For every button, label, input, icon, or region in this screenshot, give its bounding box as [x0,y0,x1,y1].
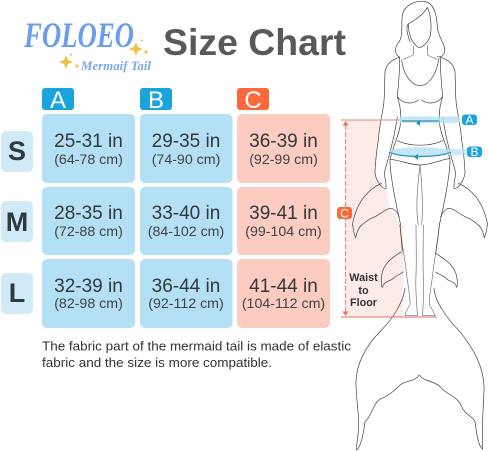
cell S B: 29-35 in [152,131,220,152]
logo [23,15,152,73]
measure B hip band [389,145,482,160]
waist to floor label [349,272,378,309]
waist to floor label: to [358,285,369,297]
cell M A: (72-88 cm) [54,224,123,240]
column header C [237,87,269,114]
cell M A: 28-35 in [54,203,123,224]
cell S A: (64-78 cm) [54,152,123,168]
cell L C: 41-44 in [249,276,318,297]
cell M C: 39-41 in [249,203,318,224]
footnote text: fabric and the size is more compatible. [42,356,272,370]
measure A waist band: A [465,113,474,127]
waist to floor label: Waist [349,272,378,284]
cell S C [237,114,330,183]
row label S [1,131,33,172]
waist to floor shaded area [345,120,403,317]
cell S A [42,114,135,183]
row label M [1,201,33,242]
figure upper body [352,1,488,227]
mermaid figure [352,1,488,450]
cell M A [42,187,135,255]
footnote text: The fabric part of the mermaid tail is made of elastic [42,340,351,354]
cell S C: (92-99 cm) [249,152,318,168]
cell M C [237,187,330,255]
cell L C [237,259,330,328]
column header B: B [148,87,164,114]
cell L A: (82-98 cm) [54,296,123,312]
waist to floor label: Floor [350,297,378,309]
logo: Mermaif Tail [80,59,152,73]
cell M B: 33-40 in [152,203,220,224]
cell L A: 32-39 in [54,276,123,297]
row label S: S [8,136,26,166]
cell L A [42,259,135,328]
column header A: A [50,87,66,114]
cell L B [140,259,232,328]
cell S B: (74-90 cm) [152,152,220,168]
cell M C: (99-104 cm) [245,224,322,240]
cell M B [140,187,232,255]
cell S C: 36-39 in [249,131,318,152]
badge C: C [340,206,349,220]
row label L [1,273,33,314]
waist to floor measurement line [341,120,437,317]
column header A [42,87,74,114]
footnote text [42,340,351,370]
column header B [140,87,172,114]
row label M: M [6,207,28,237]
title: Size Chart [163,21,347,63]
figure tail [353,225,487,450]
cell S B [140,114,232,183]
badge C [337,206,352,220]
row label L: L [9,278,25,308]
measure B hip band: B [470,145,479,159]
cell L B: (92-112 cm) [148,296,224,312]
cell L C: (104-112 cm) [242,296,325,312]
column header C: C [244,87,262,114]
cell L B: 36-44 in [152,276,220,297]
size table [42,114,330,328]
measure A waist band [400,113,477,127]
cell S A: 25-31 in [54,131,123,152]
logo: FOLOEO [23,15,134,55]
cell M B: (84-102 cm) [148,224,224,240]
